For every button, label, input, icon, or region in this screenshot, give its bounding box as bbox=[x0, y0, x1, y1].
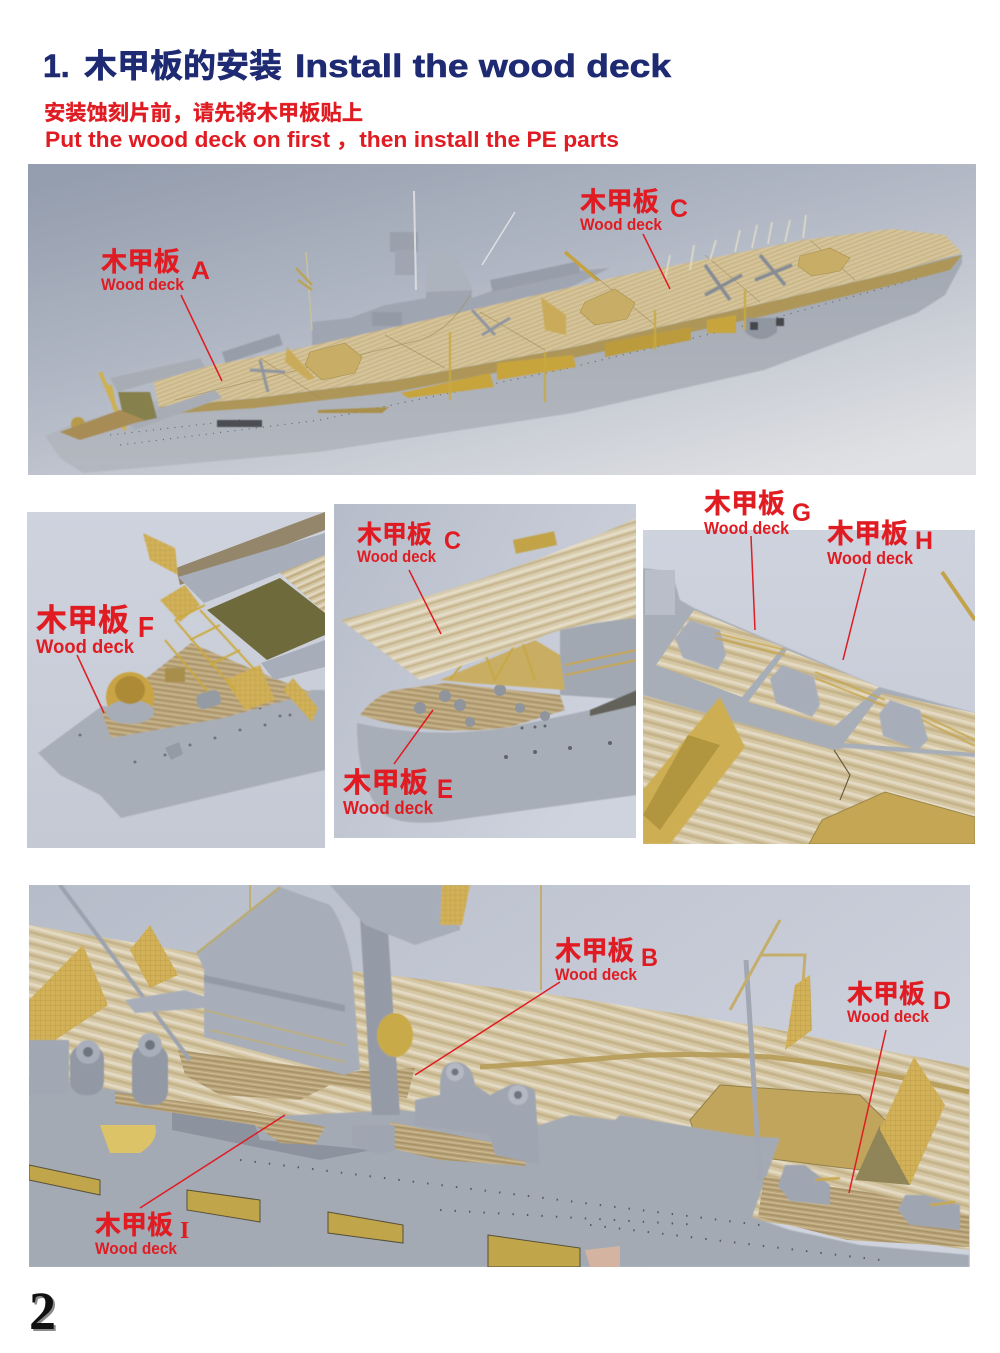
panel: stern close-up bbox=[334, 504, 637, 838]
flight deck aft wood bbox=[280, 555, 325, 613]
label: wood deck D bbox=[847, 979, 951, 1193]
label: wood deck I: I bbox=[180, 1218, 189, 1244]
label: wood deck I: 木甲板 bbox=[95, 1210, 173, 1240]
flight deck wood bbox=[29, 925, 969, 1250]
structure under flight deck bbox=[440, 531, 637, 716]
label: wood deck D: 木甲板 bbox=[847, 979, 925, 1009]
lower wood deck bbox=[643, 690, 975, 844]
label: wood deck B: 木甲板 bbox=[555, 936, 634, 966]
wood gun platforms bbox=[656, 610, 783, 697]
label: wood deck E: Wood deck bbox=[343, 798, 434, 818]
olive lift well bbox=[207, 578, 325, 660]
gold screens left bbox=[29, 925, 178, 1050]
label: wood deck F: F bbox=[138, 612, 154, 644]
grey lift rails bbox=[178, 533, 325, 603]
label: wood deck F bbox=[36, 603, 154, 713]
label: wood deck B: Wood deck bbox=[555, 965, 637, 984]
label: wood deck C: 木甲板 bbox=[580, 187, 659, 217]
wood platform around funnel bbox=[178, 1050, 415, 1100]
stern hull bbox=[357, 700, 637, 823]
label: wood deck G: 木甲板 bbox=[704, 489, 785, 519]
mast bbox=[60, 885, 470, 1115]
twin gun mounts bbox=[675, 620, 975, 750]
grey funnels left bbox=[29, 1033, 168, 1105]
title: Install the wood deck bbox=[295, 48, 671, 84]
label: wood deck C bbox=[357, 521, 461, 634]
panel: bow close-up bbox=[27, 512, 325, 848]
label: wood deck B: B bbox=[641, 944, 658, 972]
panel: gun platforms close-up bbox=[643, 530, 975, 844]
label: wood deck B bbox=[415, 936, 658, 1075]
funnel bbox=[197, 887, 360, 1075]
label: wood deck H bbox=[827, 519, 933, 660]
lower wood deck bbox=[360, 683, 565, 731]
lower gun platform wood bbox=[758, 1177, 969, 1247]
gold lift bbox=[690, 1085, 890, 1170]
grey gallery bbox=[643, 568, 975, 757]
title: 1. bbox=[43, 48, 70, 84]
panel: island close-up bbox=[29, 885, 970, 1267]
masts bbox=[296, 191, 600, 330]
label: wood deck H: Wood deck bbox=[827, 548, 913, 568]
label: wood deck D: Wood deck bbox=[847, 1007, 929, 1026]
stern lift and gallery bbox=[60, 358, 222, 440]
title bbox=[43, 48, 671, 84]
gold lift hatch bbox=[809, 792, 975, 844]
title: 木甲板的安装 bbox=[84, 48, 282, 84]
gold structures bbox=[106, 533, 318, 724]
bow hull bbox=[38, 690, 325, 818]
label: wood deck I bbox=[95, 1115, 285, 1258]
label: wood deck C bbox=[580, 187, 688, 289]
label: wood deck A: Wood deck bbox=[101, 275, 184, 294]
subtitle: english: Put the wood deck on first ，then install the PE parts bbox=[45, 127, 619, 152]
ship hull bbox=[45, 255, 962, 473]
grey hull bbox=[29, 1075, 969, 1267]
gallery openings bbox=[159, 255, 962, 427]
label: wood deck F: 木甲板 bbox=[36, 603, 129, 638]
label: wood deck C: 木甲板 bbox=[357, 521, 432, 549]
deck lifts bbox=[305, 248, 850, 380]
label: wood deck D: D bbox=[933, 987, 951, 1015]
gold screen right bbox=[880, 1057, 945, 1185]
label: wood deck G: Wood deck bbox=[704, 518, 789, 538]
label: wood deck H: 木甲板 bbox=[827, 519, 908, 549]
label: wood deck C: C bbox=[444, 527, 461, 555]
bow wood deck bbox=[102, 643, 312, 738]
label: wood deck E: E bbox=[437, 774, 453, 804]
twin gun mounts bbox=[778, 1165, 960, 1230]
label: wood deck F: Wood deck bbox=[36, 637, 134, 658]
wood deck bbox=[153, 229, 962, 407]
subtitle: chinese: 安装蚀刻片前，请先将木甲板贴上 bbox=[44, 101, 363, 125]
gallery windows bbox=[29, 1125, 620, 1267]
gold screens and planes bbox=[250, 215, 806, 402]
label: wood deck A: A bbox=[191, 257, 210, 285]
label: wood deck G bbox=[704, 489, 811, 630]
page number: 2 bbox=[29, 1281, 56, 1341]
label: wood deck H: H bbox=[915, 527, 933, 555]
wood walkway strips bbox=[115, 1092, 530, 1166]
panel: full ship photo bbox=[28, 164, 976, 475]
radio mast bbox=[250, 885, 812, 1180]
label: wood deck E: 木甲板 bbox=[343, 767, 428, 798]
label: wood deck C: Wood deck bbox=[580, 215, 662, 234]
label: wood deck E bbox=[343, 710, 453, 818]
page number: 2 bbox=[31, 1283, 58, 1343]
recessed gallery shadow bbox=[172, 1112, 372, 1160]
gold deck line bbox=[480, 1054, 969, 1092]
gold ramp bbox=[643, 697, 745, 844]
label: wood deck A: 木甲板 bbox=[101, 247, 180, 277]
label: wood deck C: Wood deck bbox=[357, 548, 437, 566]
label: wood deck G: G bbox=[792, 499, 811, 527]
flight deck wood bbox=[341, 518, 637, 680]
label: wood deck A bbox=[101, 247, 222, 381]
island superstructure bbox=[222, 232, 610, 363]
grey deckhouses bbox=[352, 1062, 770, 1175]
label: wood deck C: C bbox=[670, 195, 688, 223]
label: wood deck I: Wood deck bbox=[95, 1239, 177, 1258]
